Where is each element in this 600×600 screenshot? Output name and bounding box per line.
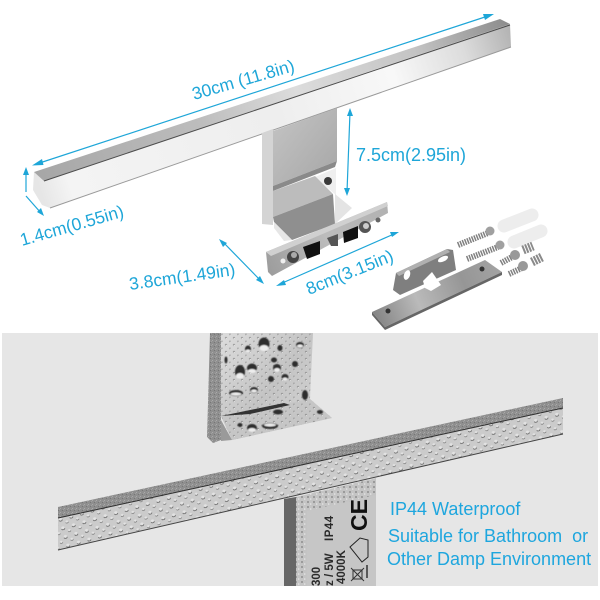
lamp bar	[33, 19, 511, 208]
wall bracket	[372, 249, 502, 330]
dimension arrows	[23, 14, 494, 286]
label text: z / 5W	[324, 553, 336, 586]
long screws	[458, 226, 504, 259]
lower bar with condensation	[58, 398, 563, 550]
suitability caption line 2: Other Damp Environment	[387, 549, 591, 569]
CE mark: CE	[346, 499, 372, 531]
label text	[311, 515, 348, 586]
dimension label: length: 30cm (11.8in)	[190, 55, 297, 104]
lamp stem and mounting block	[262, 108, 352, 241]
waterproof caption: IP44 Waterproof	[390, 499, 521, 519]
short screws	[501, 246, 542, 274]
dimension label: plate width: 8cm(3.15in)	[303, 246, 396, 299]
panel: waterproof photo	[2, 333, 598, 586]
product diagram: lamp with dimensions	[18, 14, 511, 299]
dimension label: stem height: 7.5cm(2.95in)	[356, 145, 466, 165]
label text: 4000K	[336, 549, 348, 584]
icon: house	[350, 538, 368, 562]
suitability caption line 1: Suitable for Bathroom or	[388, 526, 588, 546]
screws and wall plugs	[458, 215, 542, 274]
label text: IP44	[324, 515, 336, 541]
dimension label: plate depth: 3.8cm(1.49in)	[128, 259, 237, 294]
wall plugs	[504, 215, 541, 242]
upper stem with water droplets	[207, 333, 332, 443]
large water droplets	[224, 338, 323, 432]
label text: 300	[311, 567, 323, 586]
lower stem with product label	[284, 478, 376, 586]
dimension label: depth of bar: 1.4cm(0.55in)	[18, 201, 126, 250]
mounting plate	[266, 202, 388, 276]
panel background	[2, 333, 598, 586]
icon: crossed bin	[351, 565, 367, 581]
